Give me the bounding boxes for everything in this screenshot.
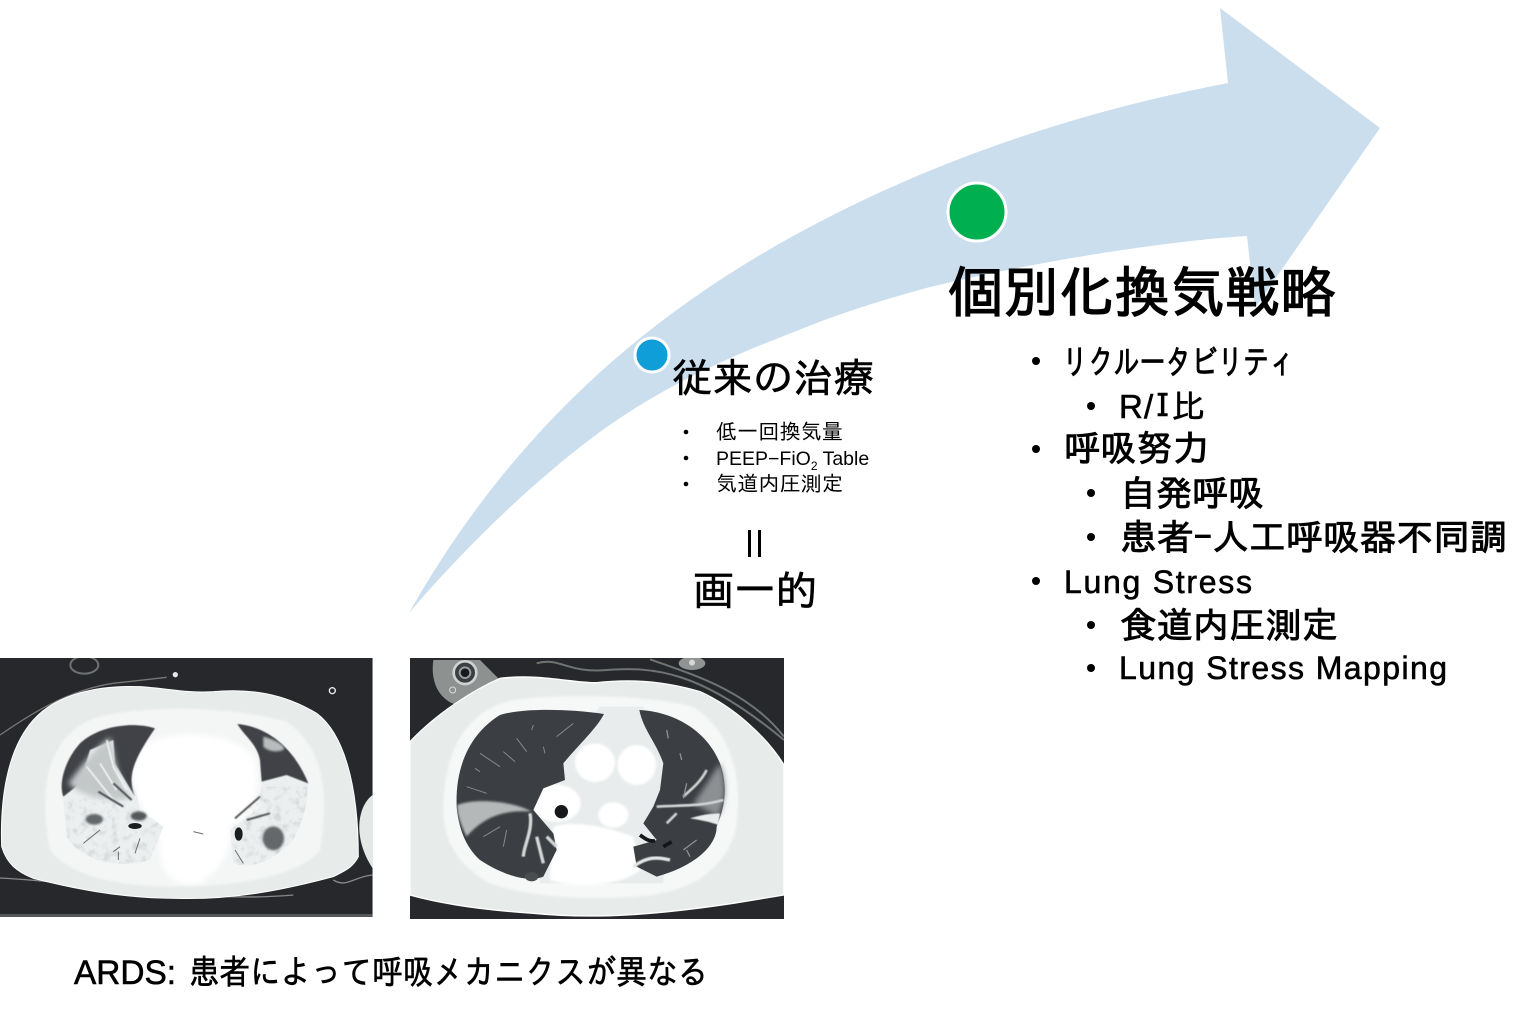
marker: green dot [948, 183, 1006, 241]
mediastinum [133, 735, 257, 884]
left-side lung on the image right [633, 710, 725, 877]
caption [74, 954, 708, 992]
caption: 患者によって呼吸メカニクスが異なる [189, 955, 708, 989]
CT scan: dependent and non-uniform lesions [410, 657, 784, 919]
left lung [132, 782, 164, 845]
right lung [230, 814, 252, 850]
list: individualized strategy items: 食道内圧測定 [1120, 607, 1338, 643]
list: conventional treatment items: 2 [811, 459, 818, 473]
list: conventional treatment items: 気道内圧測定 [716, 473, 843, 494]
equals sign rotated [748, 530, 761, 557]
list: individualized strategy items: Lung Stress Mapping [1119, 650, 1447, 686]
text: uniform: 画一的 [693, 569, 817, 610]
list: individualized strategy items: 患者−人工呼吸器不同調 [1120, 519, 1507, 555]
list: conventional treatment items [684, 421, 869, 494]
right-side lung on the image left [457, 710, 604, 879]
list: individualized strategy items: 呼吸努力 [1064, 430, 1209, 466]
heading: conventional treatment: 従来の治療 [672, 357, 874, 397]
heading: individualized ventilation strategy: 個別化換気戦略 [948, 264, 1336, 319]
CT scan: diffuse consolidation [0, 656, 373, 917]
curved arrow [409, 8, 1380, 613]
list: conventional treatment items: PEEP−FiO [716, 448, 811, 470]
list: individualized strategy items: R/I比 [1119, 388, 1205, 425]
list: individualized strategy items: リクルータビリティ [1062, 345, 1295, 379]
list: individualized strategy items: 自発呼吸 [1120, 475, 1264, 511]
marker: blue dot [635, 338, 669, 372]
caption: ARDS: [74, 954, 176, 992]
mediastinum and great vessels [530, 707, 667, 883]
list: conventional treatment items: 低一回換気量 [716, 421, 843, 442]
list: conventional treatment items: Table [818, 448, 869, 470]
list: individualized strategy items: Lung Stress [1064, 564, 1252, 600]
list: individualized strategy items [1032, 345, 1507, 686]
